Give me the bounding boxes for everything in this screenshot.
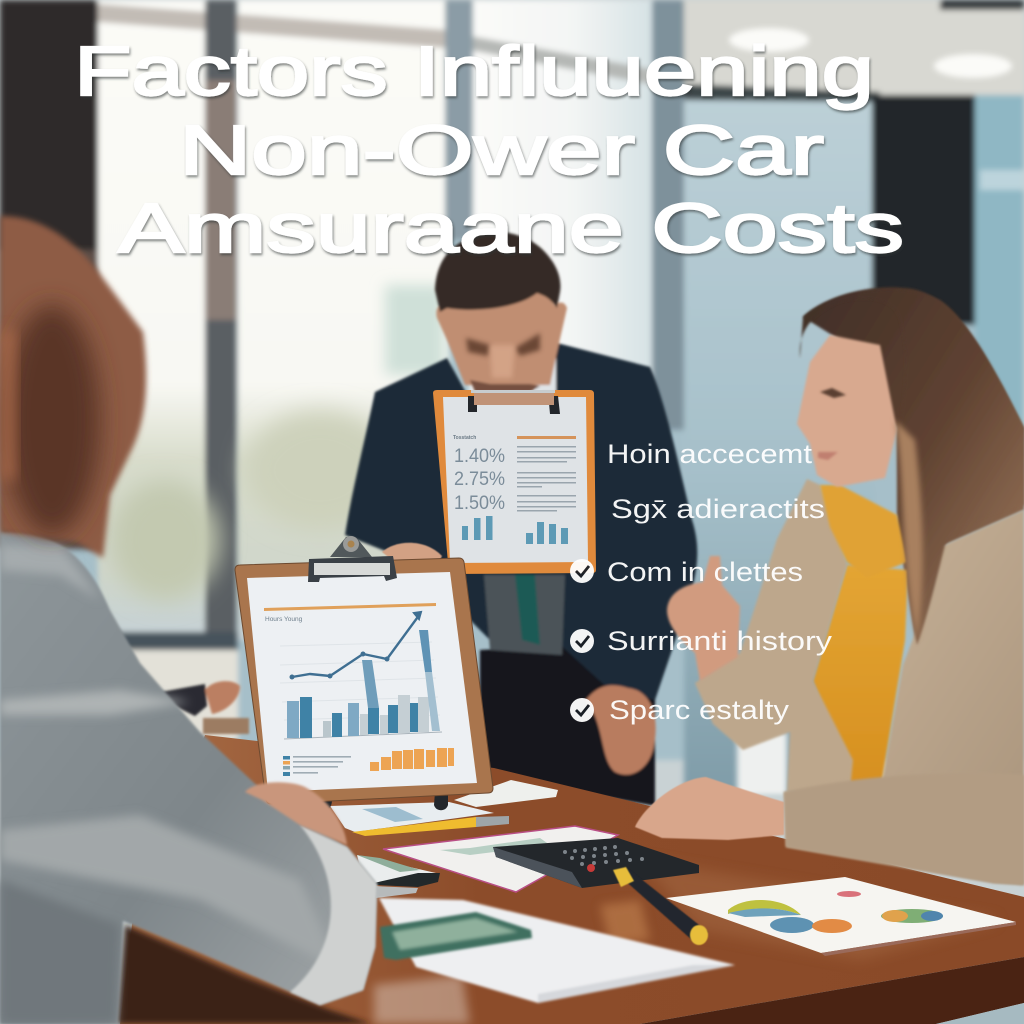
woman on the right [635, 287, 1024, 885]
lower white document [379, 898, 735, 1003]
blazer cuff [784, 773, 1024, 885]
small upper document [454, 780, 558, 807]
orange bars [370, 748, 454, 771]
mini bars [462, 516, 568, 544]
stand legs [320, 787, 448, 810]
left hair [0, 216, 146, 558]
clip [308, 536, 397, 582]
orange clipboard [433, 390, 596, 574]
clipboard label: Tosstatch [453, 435, 476, 441]
title line 1: Factors Influuening [74, 32, 874, 110]
sweater cuff [290, 825, 377, 1005]
center man in suit [345, 232, 697, 806]
title line 3: Amsuraane Costs [118, 189, 904, 267]
hair side [800, 289, 1024, 645]
item 4: Surrianti history [607, 626, 833, 656]
facial features [818, 388, 846, 460]
yellow sweater [813, 565, 908, 792]
left foreground person [0, 216, 377, 1024]
face [797, 335, 897, 487]
bars [287, 630, 440, 738]
trend line [290, 612, 421, 680]
raised hand [667, 556, 740, 681]
rate 1.40%: 1.40% [454, 446, 505, 467]
paper [247, 572, 477, 792]
resting hand [635, 777, 784, 840]
orange board [433, 390, 596, 574]
blazer left sleeve [695, 479, 853, 792]
rate 2.75%: 2.75% [454, 469, 505, 490]
orange rule and lines [517, 436, 576, 512]
legend [283, 756, 351, 776]
hair highlight [895, 420, 923, 640]
yellow pencil [352, 816, 509, 836]
item 3: Com in clettes [607, 557, 803, 587]
item 5: Sparc estalty [609, 695, 790, 725]
hair streak [0, 330, 16, 480]
distant person hand and tablet [150, 681, 249, 734]
paper behind clipboard [330, 802, 494, 832]
background office windows [0, 0, 1024, 796]
chart title: Hours Young [265, 616, 303, 623]
hair back [803, 287, 1024, 645]
paper [443, 397, 588, 563]
paper chart lines [440, 838, 550, 855]
hair shadow [4, 305, 100, 535]
brown clipboard with chart [235, 536, 493, 810]
green card [380, 912, 532, 960]
title line 2: Non-Ower Car [179, 111, 824, 189]
sweater [0, 532, 377, 1024]
orange rule [264, 603, 436, 611]
item 2: Sgx̄ adieractits [611, 494, 825, 524]
phone and notes [357, 855, 440, 898]
foreground hand on clipboard [245, 782, 347, 845]
rate 1.50%: 1.50% [454, 493, 505, 514]
board [235, 558, 493, 804]
clip [468, 396, 560, 414]
axis grid [280, 642, 442, 739]
factor list [570, 439, 833, 725]
scarf [820, 485, 907, 578]
item 1: Hoin accecemt [607, 439, 813, 469]
table documents [330, 780, 1016, 1003]
pink edged paper [383, 826, 618, 892]
right white document [666, 877, 1016, 956]
title [74, 32, 904, 267]
man's fingers over clipboard [382, 543, 442, 560]
black pen [613, 867, 708, 940]
clip plate [471, 390, 555, 405]
table [117, 735, 1024, 1024]
blazer lower [784, 510, 1024, 885]
sweater folds [0, 545, 340, 1024]
calculator [493, 838, 699, 888]
pen yellow ends [613, 867, 708, 945]
